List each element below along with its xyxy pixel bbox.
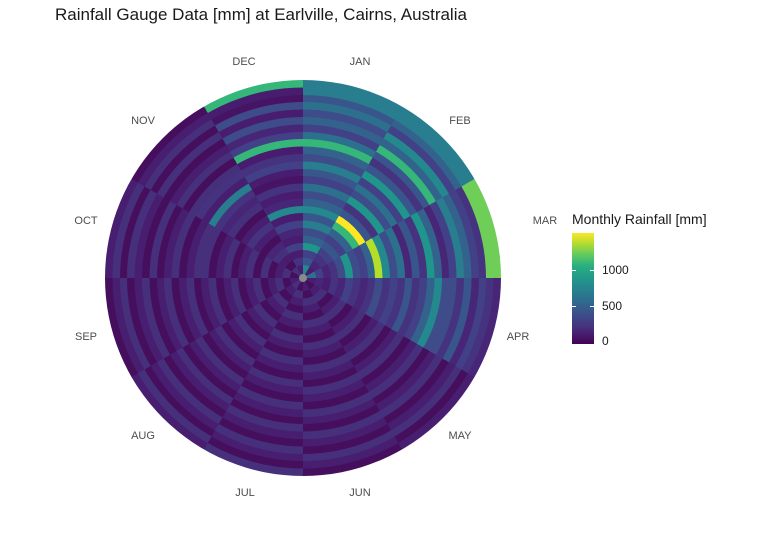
month labels: MAY <box>448 430 472 442</box>
legend title: Monthly Rainfall [mm] <box>572 211 707 227</box>
month labels: AUG <box>131 430 155 442</box>
month labels: DEC <box>232 56 256 68</box>
legend: 500 <box>602 299 622 313</box>
legend: 0 <box>602 334 609 348</box>
month labels: OCT <box>74 215 98 227</box>
month labels: JAN <box>350 56 370 68</box>
title: Rainfall Gauge Data [mm] at Earlville, Cairns, Australia <box>55 5 467 24</box>
month labels: SEP <box>75 331 97 343</box>
month labels: FEB <box>449 115 471 127</box>
legend tick labels: 1000 <box>602 263 629 277</box>
colorbar <box>572 233 594 344</box>
month labels: JUL <box>235 487 255 499</box>
month labels: JUN <box>349 487 371 499</box>
month labels: MAR <box>533 215 557 227</box>
month labels: NOV <box>131 115 155 127</box>
month labels: APR <box>507 331 529 343</box>
legend <box>572 211 707 348</box>
